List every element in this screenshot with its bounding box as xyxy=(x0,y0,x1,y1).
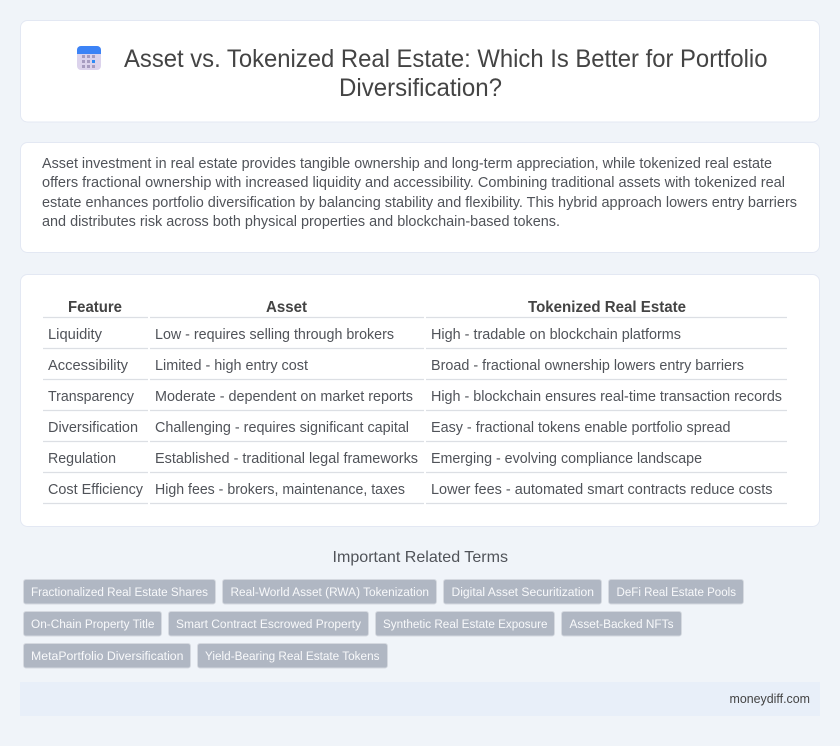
row: regulation: Established - traditional legal frameworks xyxy=(155,451,418,467)
row: transparency: Moderate - dependent on market reports xyxy=(155,389,413,405)
heading: related terms: Important Related Terms xyxy=(332,549,508,566)
row: transparency: Transparency xyxy=(48,389,135,405)
tags: related terms: Asset-Backed NFTs xyxy=(570,617,674,631)
tags: related terms: Real-World Asset (RWA) Tokenization xyxy=(230,585,429,599)
footer: moneydiff.com xyxy=(730,692,810,706)
row: cost efficiency: Lower fees - automated smart contracts reduce costs xyxy=(431,482,772,498)
icon: calendar xyxy=(77,46,101,70)
text block: summary paragraph: estate enhances portfolio diversification by balancing stability and flexibility. This hybrid approach lowers entry barriers xyxy=(42,195,797,211)
tags: related terms: MetaPortfolio Diversification xyxy=(31,649,184,663)
row: liquidity xyxy=(48,327,681,343)
text block: summary paragraph: offers fractional ownership with increased liquidity and accessibility. Combining traditional assets with tokenized real xyxy=(42,175,785,191)
row: diversification xyxy=(48,420,730,436)
table header: Feature xyxy=(68,299,122,316)
table header xyxy=(68,299,686,316)
row: regulation: Emerging - evolving compliance landscape xyxy=(431,451,702,467)
row: transparency xyxy=(48,389,782,405)
row: diversification: Challenging - requires significant capital xyxy=(155,420,409,436)
row: liquidity: High - tradable on blockchain platforms xyxy=(431,327,681,343)
panel: summary xyxy=(20,142,820,252)
row: accessibility xyxy=(48,358,744,374)
tags: related terms: Synthetic Real Estate Exposure xyxy=(383,617,548,631)
tags: related terms: Yield-Bearing Real Estate Tokens xyxy=(205,649,380,663)
text block: summary paragraph xyxy=(42,156,797,230)
row: accessibility: Limited - high entry cost xyxy=(155,358,308,374)
row: regulation: Regulation xyxy=(48,451,116,467)
tags: related terms: DeFi Real Estate Pools xyxy=(616,585,736,599)
tags: related terms: Smart Contract Escrowed Property xyxy=(176,617,362,631)
panel: header xyxy=(20,20,820,122)
row: cost efficiency xyxy=(48,482,772,498)
row: diversification: Diversification xyxy=(48,420,138,436)
title xyxy=(124,45,768,102)
row: diversification: Easy - fractional tokens enable portfolio spread xyxy=(431,420,730,436)
row: cost efficiency: High fees - brokers, maintenance, taxes xyxy=(155,482,405,498)
panel: comparison table xyxy=(20,274,820,526)
text block: summary paragraph: Asset investment in real estate provides tangible ownership and long-term appreciation, while tokenized real estate xyxy=(42,156,772,172)
table header: Tokenized Real Estate xyxy=(528,299,686,316)
row: transparency: High - blockchain ensures real-time transaction records xyxy=(431,389,782,405)
footer xyxy=(20,682,820,716)
text block: summary paragraph: and distributes risk across both physical properties and blockchain-based tokens. xyxy=(42,214,560,230)
tags: related terms: Digital Asset Securitization xyxy=(452,585,594,599)
row: accessibility: Accessibility xyxy=(48,358,129,374)
title: Diversification? xyxy=(339,74,502,102)
row: liquidity: Liquidity xyxy=(48,327,103,343)
tags: related terms: On-Chain Property Title xyxy=(31,617,155,631)
tags: related terms: Fractionalized Real Estate Shares xyxy=(31,585,208,599)
row: liquidity: Low - requires selling through brokers xyxy=(155,327,394,343)
row: cost efficiency: Cost Efficiency xyxy=(48,482,144,498)
row: accessibility: Broad - fractional ownership lowers entry barriers xyxy=(431,358,744,374)
table header: Asset xyxy=(266,299,308,316)
title: Asset vs. Tokenized Real Estate: Which Is Better for Portfolio xyxy=(124,45,768,73)
tags: related terms xyxy=(24,580,744,668)
row: regulation xyxy=(48,451,702,467)
